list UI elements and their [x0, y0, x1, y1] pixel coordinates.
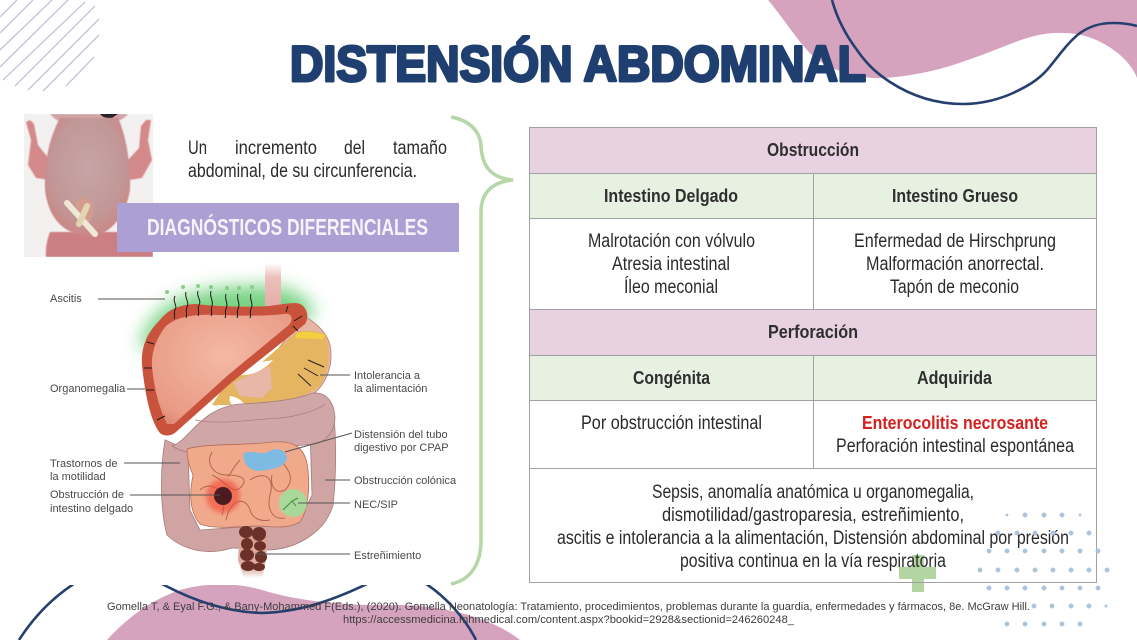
right labels: NEC/SIP	[354, 499, 398, 511]
rectum	[238, 530, 268, 578]
top-right navy wave line	[832, 0, 1137, 104]
row: obstrucción causes: Atresia intestinal	[612, 254, 730, 275]
dot grid decoration	[978, 513, 1109, 626]
row: other causes	[530, 468, 1096, 592]
ascending and descending colon	[161, 410, 336, 552]
row: perforación header	[530, 310, 1096, 356]
stool	[239, 526, 267, 571]
right labels: Obstrucción colónica	[354, 475, 457, 487]
right labels: Estreñimiento	[354, 550, 421, 562]
left labels: intestino delgado	[50, 503, 133, 515]
source citation: https://accessmedicina.mhmedical.com/content.aspx?bookid=2928&sectionid=246260248_	[343, 614, 795, 626]
enlarged liver rim	[142, 303, 307, 435]
bottom decorative blob and lines	[19, 580, 520, 640]
stomach contents	[212, 331, 329, 405]
NEC green area	[279, 489, 307, 517]
row: intestino headers: Intestino Delgado	[604, 186, 738, 206]
right labels	[255, 370, 457, 562]
small intestine	[187, 442, 309, 527]
intro text: incremento	[235, 138, 317, 159]
row: obstrucción causes: Íleo meconial	[624, 277, 718, 298]
row: perforación causes: Perforación intestinal espontánea	[836, 436, 1074, 457]
row: perforación types: Congénita	[633, 368, 711, 388]
white gap below the stomach	[240, 360, 273, 375]
green plus decoration	[899, 555, 936, 592]
left labels: Ascitis	[50, 293, 82, 305]
row: other causes: Sepsis, anomalía anatómica u organomegalia,	[652, 482, 974, 503]
banner: diagnósticos diferenciales	[117, 203, 459, 252]
row: intestino headers: Intestino Grueso	[892, 186, 1018, 206]
source citation: Gomella T, & Eyal F.G., & Bany-Mohammed F(Eds.), (2020). Gomella Neonatología: Tratamiento, procedimientos, problemas durante la guardia, enfermedades y fármacos, 8e. McGraw Hill.	[107, 601, 1030, 613]
row: perforación types: Adquirida	[917, 368, 993, 388]
right labels: la alimentación	[354, 383, 427, 395]
row: perforación causes: Enterocolitis necrosante	[862, 413, 1048, 433]
green ascites glow	[140, 286, 315, 360]
row: obstrucción causes: Tapón de meconio	[890, 277, 1019, 298]
row: obstrucción causes: Enfermedad de Hirschprung	[854, 231, 1056, 252]
row: intestino headers	[530, 174, 1096, 218]
table: differential diagnoses	[530, 128, 1096, 592]
row: obstrucción causes: Malrotación con vólvulo	[588, 231, 755, 252]
anatomy illustration	[50, 263, 457, 578]
left labels: Organomegalia	[50, 383, 126, 395]
lesser curve of the stomach	[233, 366, 272, 398]
left labels: Trastornos de	[50, 458, 117, 470]
right labels: Intolerancia a	[354, 370, 421, 382]
ascites droplets	[165, 284, 254, 294]
row: obstrucción causes: Malformación anorrectal.	[866, 254, 1044, 275]
gastric arrows	[298, 360, 324, 386]
left labels: Obstrucción de	[50, 489, 124, 501]
striped corner decoration	[0, 0, 99, 91]
row: obstrucción causes	[530, 218, 1096, 310]
stomach	[215, 305, 331, 405]
umbilical clamp	[67, 203, 95, 234]
row: perforación causes	[530, 400, 1096, 468]
row: obstrucción header	[530, 128, 1096, 174]
photo: newborn with distended abdomen	[24, 114, 153, 257]
transverse colon	[172, 393, 335, 453]
intro text: del	[344, 138, 365, 159]
right labels: Distensión del tubo	[354, 429, 448, 441]
left labels	[50, 293, 220, 515]
row: obstrucción header: Obstrucción	[767, 140, 859, 160]
row: perforación causes: Por obstrucción intestinal	[581, 413, 762, 434]
source citation	[107, 601, 1030, 626]
row: perforación types	[530, 356, 1096, 400]
intro text	[188, 138, 447, 182]
banner: diagnósticos diferenciales: DIAGNÓSTICOS DIFERENCIALES	[147, 213, 428, 240]
CPAP distension: blue gas	[244, 449, 287, 471]
row: other causes: dismotilidad/gastroparesia, estreñimiento,	[662, 505, 964, 526]
intro text: abdominal, de su circunferencia.	[188, 161, 417, 182]
top-right decorative blob	[768, 0, 1137, 78]
green curly brace	[451, 117, 513, 584]
row: perforación header: Perforación	[768, 322, 858, 342]
small-bowel obstruction	[206, 479, 240, 513]
esophagus	[265, 263, 281, 311]
right labels: digestivo por CPAP	[354, 442, 449, 454]
row: other causes: positiva continua en la vía respiratoria	[680, 551, 946, 572]
ascites arrows	[144, 291, 302, 420]
left labels: la motilidad	[50, 471, 106, 483]
title: DISTENSIÓN ABDOMINAL	[290, 36, 866, 92]
intro text: Un	[188, 138, 207, 159]
liver	[142, 303, 307, 435]
intro text: tamaño	[393, 138, 447, 159]
